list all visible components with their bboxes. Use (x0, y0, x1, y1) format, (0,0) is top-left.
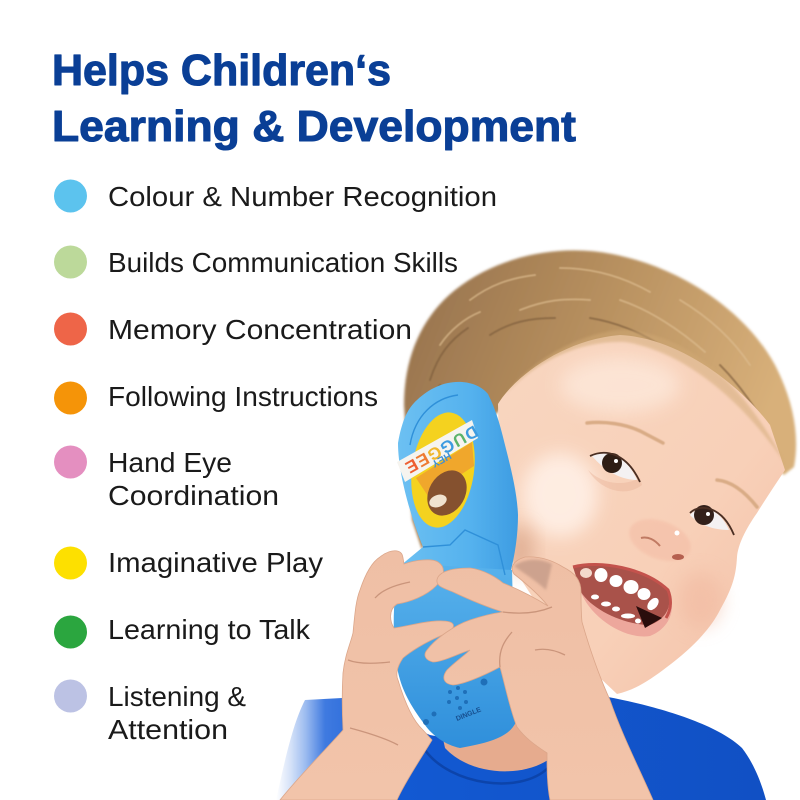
item: hand eye coordination: Hand Eye (108, 447, 232, 478)
lower lip (580, 585, 672, 636)
phone maker mark: DINGLE (455, 706, 483, 723)
title: Helps Children‘s (52, 46, 391, 95)
upper lip (573, 565, 670, 618)
face (498, 335, 785, 694)
benefits list (54, 180, 497, 745)
title: Learning & Development (52, 102, 576, 151)
left hand (280, 551, 453, 800)
left hand creases (348, 582, 410, 745)
mouth (573, 565, 672, 636)
item: learning to talk: Learning to Talk (108, 614, 311, 645)
phone sticker (397, 408, 482, 532)
phone inner edge shading (410, 395, 505, 575)
right hand creases (500, 607, 565, 667)
dark throat (636, 606, 662, 628)
phone body (394, 563, 516, 748)
item: hand eye coordination (54, 446, 279, 511)
item: imaginative play: Imaginative Play (108, 547, 323, 578)
photo: smiling boy with toy phone (276, 250, 796, 800)
item: listening and attention: Listening & (108, 681, 246, 712)
item: following instructions: Following Instructions (108, 381, 378, 412)
right hand (425, 557, 653, 800)
item: colour and number recognition: Colour & Number Recognition (108, 181, 497, 212)
title band (397, 420, 478, 482)
hair strands (425, 268, 762, 420)
orange cap (416, 442, 474, 496)
cartoon dog (419, 463, 475, 523)
sticker small text: HEY (429, 449, 453, 469)
hairline fringe (505, 330, 786, 465)
toy phone (394, 382, 518, 748)
left eye (588, 453, 642, 491)
item: listening and attention (54, 680, 246, 745)
item: listening and attention: Attention (108, 714, 228, 745)
item: memory concentration: Memory Concentration (108, 314, 412, 345)
sticker oval (404, 408, 482, 532)
hair (404, 250, 796, 550)
blue t-shirt (276, 697, 766, 800)
speaker dots (423, 678, 488, 725)
shirt collar (425, 750, 548, 783)
face highlights (506, 357, 722, 628)
item: hand eye coordination: Coordination (108, 480, 279, 511)
sticker logo text: DUGGEE (402, 422, 481, 477)
thumb shading (514, 560, 552, 590)
upper teeth (580, 568, 661, 612)
neck (440, 720, 556, 771)
title (52, 46, 576, 151)
nose (623, 511, 697, 569)
eyebrows (587, 422, 757, 507)
dog muzzle (427, 492, 449, 510)
lower teeth (591, 594, 641, 624)
right eye (690, 505, 734, 535)
item: learning to talk (54, 614, 311, 648)
item: builds communication skills: Builds Communication Skills (108, 247, 458, 278)
phone flip top (398, 382, 518, 574)
mouth interior (573, 565, 669, 625)
